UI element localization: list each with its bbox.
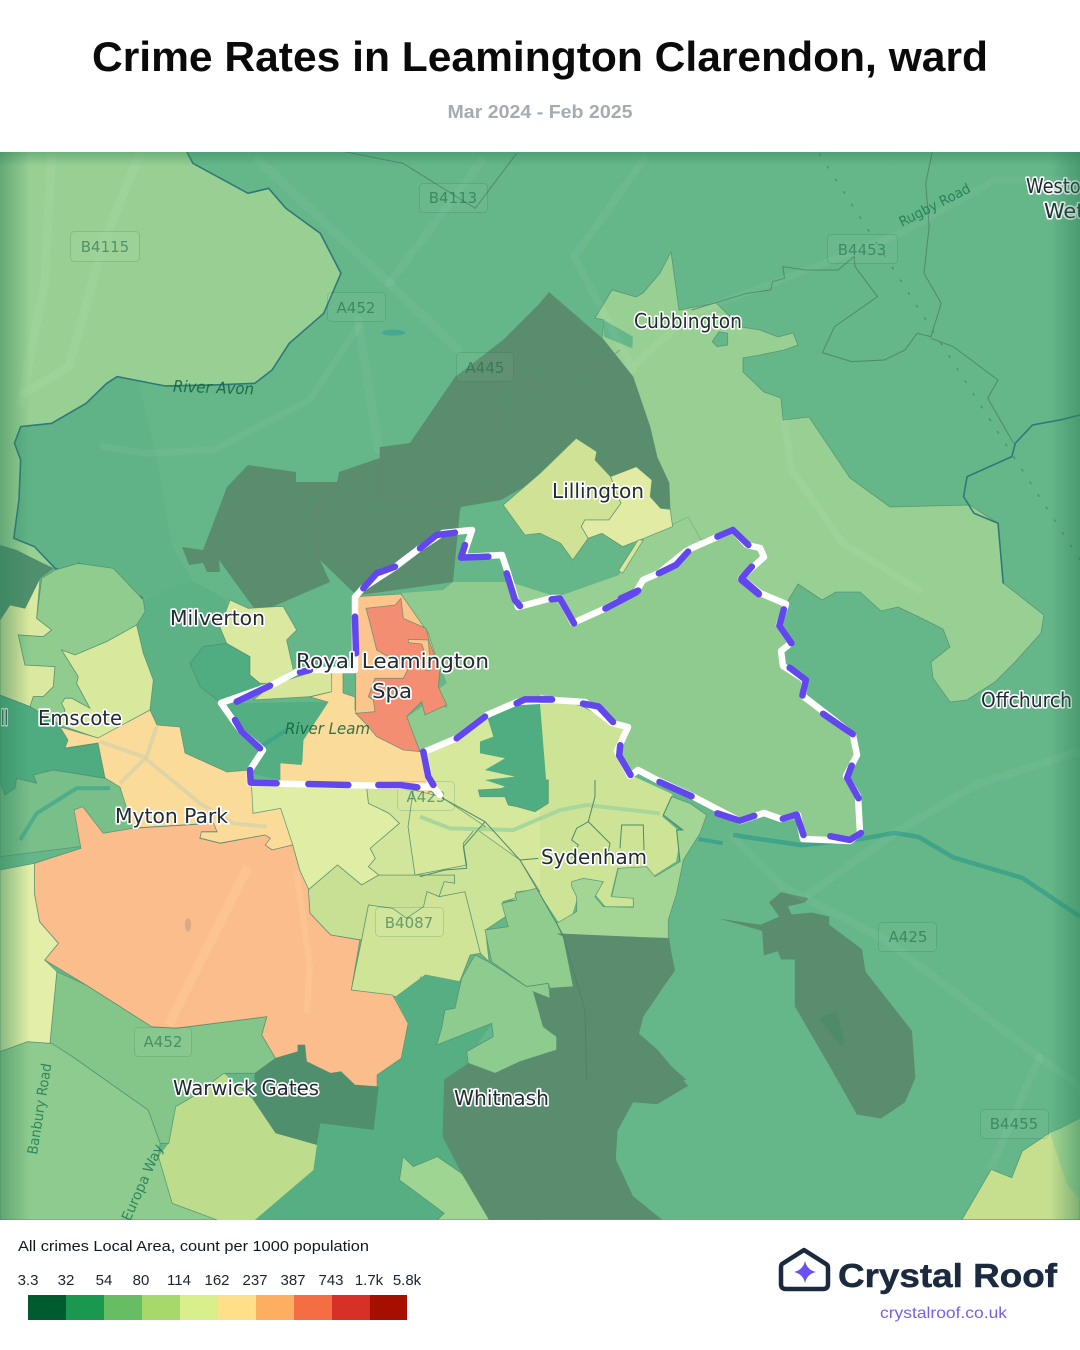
area: south of ward lime [428, 718, 544, 900]
ward boundary: white base line [221, 530, 860, 841]
choropleth map [0, 150, 1080, 1224]
road and river names: Rugby Road [897, 181, 973, 231]
area: Sydenham [540, 694, 1080, 1220]
icon: house with star [781, 1250, 828, 1289]
place names: Cubbington [634, 309, 742, 333]
legend [18, 1238, 422, 1320]
area: north-east farmland light green [595, 252, 1044, 702]
road shields: A425 [889, 928, 927, 946]
area: southern dark zone [540, 934, 688, 1220]
place names: Milverton [170, 606, 265, 630]
area: town centre [225, 670, 332, 780]
road and river names: River Avon [173, 377, 254, 398]
place names: Myton Park [115, 804, 228, 828]
place names: Offchurch [981, 688, 1072, 712]
area: east of road light green [485, 888, 573, 988]
place names [1, 174, 1080, 1110]
legend values: 54 [96, 1272, 112, 1289]
area: dark hill east [719, 892, 915, 1119]
area: town centre salmon [356, 598, 447, 752]
map edge fade [0, 152, 1080, 1220]
area: ward pocket green [478, 780, 548, 812]
area: town centre small peach [408, 639, 431, 671]
road shields: B4455 [990, 1115, 1038, 1133]
legend colour scale [28, 1295, 407, 1320]
wordmark: Crystal Roof [838, 1257, 1058, 1294]
place names: Sydenham [541, 845, 647, 869]
legend values [18, 1272, 422, 1289]
area: south-east lime corner [962, 1119, 1080, 1220]
place names: Warwick Gates [173, 1076, 319, 1100]
road and river names: River Leam [285, 719, 370, 738]
road shields: A445 [466, 359, 504, 377]
road shields: B4113 [429, 189, 477, 207]
area: Whitnash dark [443, 933, 687, 1080]
legend values: 237 [242, 1272, 268, 1289]
area: town centre peach [356, 594, 440, 713]
logo: Crystal Roof [781, 1250, 1058, 1322]
legend values: 114 [167, 1272, 191, 1289]
area: south light green [437, 955, 557, 1073]
legend values: 5.8k [393, 1272, 422, 1289]
road shields: B4453 [838, 241, 886, 259]
place names: Whitnash [454, 1086, 549, 1110]
ward boundary: purple dashes [235, 530, 861, 840]
road shields: B4087 [385, 914, 433, 932]
place names: ll [1, 706, 8, 730]
area: Milverton [220, 600, 297, 683]
roads through Myton [100, 727, 267, 827]
road and river names: Banbury Road [25, 1062, 55, 1156]
website: crystalroof.co.uk [880, 1305, 1008, 1322]
road shields: A452 [144, 1033, 182, 1051]
legend title: All crimes Local Area, count per 1000 population [18, 1238, 369, 1255]
area: Sydenham and Whitnash districts [420, 780, 707, 1080]
area: southern neighbourhoods [0, 785, 540, 1220]
area: north-east detail [574, 150, 1080, 590]
legend values: 32 [58, 1272, 74, 1289]
place names: Lillington [552, 479, 644, 503]
area: ward farmland and east town [402, 530, 860, 841]
road and river names [25, 181, 973, 1224]
area: canal through lime district [420, 805, 660, 830]
road shields: A423 [407, 788, 445, 806]
legend values: 80 [133, 1272, 149, 1289]
area: Sydenham light green [557, 797, 707, 938]
legend values: 162 [204, 1272, 230, 1289]
title: Crime Rates in Leamington Clarendon, ward [92, 33, 988, 80]
area: Whitnash medium green [420, 976, 461, 1080]
area: Myton pale orange [60, 670, 440, 850]
road shields: A452 [337, 299, 375, 317]
place names: Spa [372, 679, 412, 703]
legend values: 1.7k [355, 1272, 384, 1289]
area: Warwick Gates dark [253, 1045, 379, 1145]
area: Lillington [503, 438, 673, 573]
road and river names: Europa Way [119, 1142, 167, 1224]
area: big peach district [34, 807, 408, 1087]
road shields [70, 184, 1048, 1138]
place names: Emscote [38, 706, 122, 730]
subtitle: date range: Mar 2024 - Feb 2025 [448, 102, 632, 122]
legend values: 743 [318, 1272, 344, 1289]
area: western neighbourhoods [0, 545, 297, 857]
legend values: 3.3 [18, 1272, 38, 1289]
area: north-west light green [0, 150, 517, 598]
river Leam [698, 839, 723, 843]
area: northern dark low-crime zone [182, 292, 670, 613]
place names: Royal Leamington [296, 649, 489, 673]
legend values: 387 [280, 1272, 306, 1289]
road shields: B4115 [81, 238, 129, 256]
